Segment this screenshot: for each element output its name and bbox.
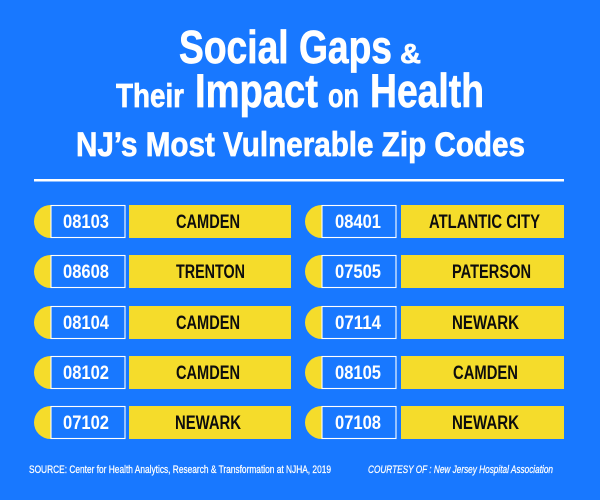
title xyxy=(116,21,484,117)
row: 07108 Newark: 07108 xyxy=(335,413,381,434)
row: 08104 Camden: 08104 xyxy=(63,313,109,334)
title: Health xyxy=(370,64,484,117)
row: 08104 Camden xyxy=(34,306,291,339)
source note: SOURCE: Center for Health Analytics, Research & Transformation at NJHA, 2019 xyxy=(29,464,331,476)
title: & xyxy=(400,38,421,69)
row: 07505 Paterson xyxy=(305,255,564,288)
row: 08401 Atlantic City xyxy=(305,205,564,238)
row: 08608 Trenton: TRENTON xyxy=(176,262,245,283)
row: 08105 Camden: 08105 xyxy=(335,363,381,384)
row: 08103 Camden xyxy=(34,205,291,238)
row: 08103 Camden: 08103 xyxy=(63,212,109,233)
row: 07102 Newark: NEWARK xyxy=(175,413,241,434)
row: 07114 Newark: 07114 xyxy=(335,313,381,334)
row: 07108 Newark: NEWARK xyxy=(452,413,519,434)
row: 07102 Newark: 07102 xyxy=(63,413,109,434)
row: 08102 Camden xyxy=(34,356,291,389)
row: 08401 Atlantic City: ATLANTIC CITY xyxy=(429,212,540,233)
title: Their xyxy=(116,77,184,114)
row: 08102 Camden: 08102 xyxy=(63,363,109,384)
row: 08401 Atlantic City: 08401 xyxy=(335,212,381,233)
row: 07114 Newark: NEWARK xyxy=(452,313,519,334)
title: Social Gaps xyxy=(179,21,392,73)
title: Impact xyxy=(195,64,318,117)
row: 08608 Trenton: 08608 xyxy=(63,262,109,283)
title: on xyxy=(328,77,359,114)
row: 08102 Camden: CAMDEN xyxy=(176,363,240,384)
subtitle: NJ’s Most Vulnerable Zip Codes xyxy=(76,126,525,164)
row: 07108 Newark xyxy=(305,406,564,439)
row: 08104 Camden: CAMDEN xyxy=(176,313,240,334)
row: 07114 Newark xyxy=(305,306,564,339)
row: 08103 Camden: CAMDEN xyxy=(176,212,240,233)
row: 07505 Paterson: PATERSON xyxy=(452,262,531,283)
row: 08105 Camden: CAMDEN xyxy=(453,363,518,384)
row: 07505 Paterson: 07505 xyxy=(335,262,381,283)
row: 08608 Trenton xyxy=(34,255,291,288)
row: 07102 Newark xyxy=(34,406,291,439)
row: 08105 Camden xyxy=(305,356,564,389)
